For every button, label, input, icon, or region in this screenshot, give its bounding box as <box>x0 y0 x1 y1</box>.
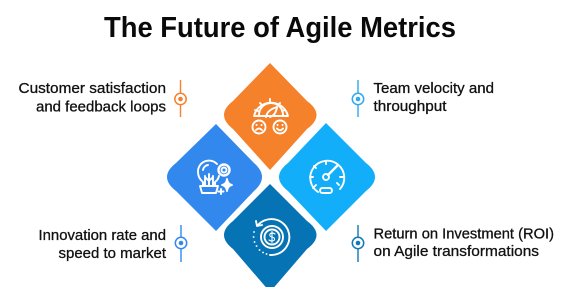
text: customer satisfaction <box>18 80 166 116</box>
icon: return on investment coin <box>254 219 289 255</box>
icon: lightbulb with gear <box>198 161 232 194</box>
text: return on investment: Return on Investment (ROI) <box>374 226 554 242</box>
text: team velocity <box>374 80 494 115</box>
text: team velocity: throughput <box>374 98 447 115</box>
text: customer satisfaction: and feedback loops <box>36 98 166 116</box>
title: The Future of Agile Metrics <box>104 12 456 44</box>
text: return on investment <box>374 226 554 260</box>
icon: satisfaction gauge with faces <box>252 99 288 134</box>
marker: customer satisfaction <box>175 80 186 117</box>
panel: blue diamond <box>167 124 262 231</box>
panel: dark blue diamond <box>224 184 316 287</box>
icon: speedometer <box>310 161 344 193</box>
marker: team velocity <box>352 80 364 117</box>
text: innovation rate <box>38 227 167 262</box>
marker: return on investment <box>352 225 364 262</box>
text: return on investment: on Agile transformations <box>374 243 539 260</box>
panel: light blue diamond <box>279 123 375 231</box>
text: innovation rate: Innovation rate and <box>38 227 166 244</box>
marker: innovation rate <box>175 225 187 262</box>
text: innovation rate: speed to market <box>58 245 167 262</box>
text: team velocity: Team velocity and <box>374 80 494 97</box>
text: customer satisfaction: Customer satisfaction <box>18 80 166 97</box>
panel: orange diamond <box>224 63 316 170</box>
